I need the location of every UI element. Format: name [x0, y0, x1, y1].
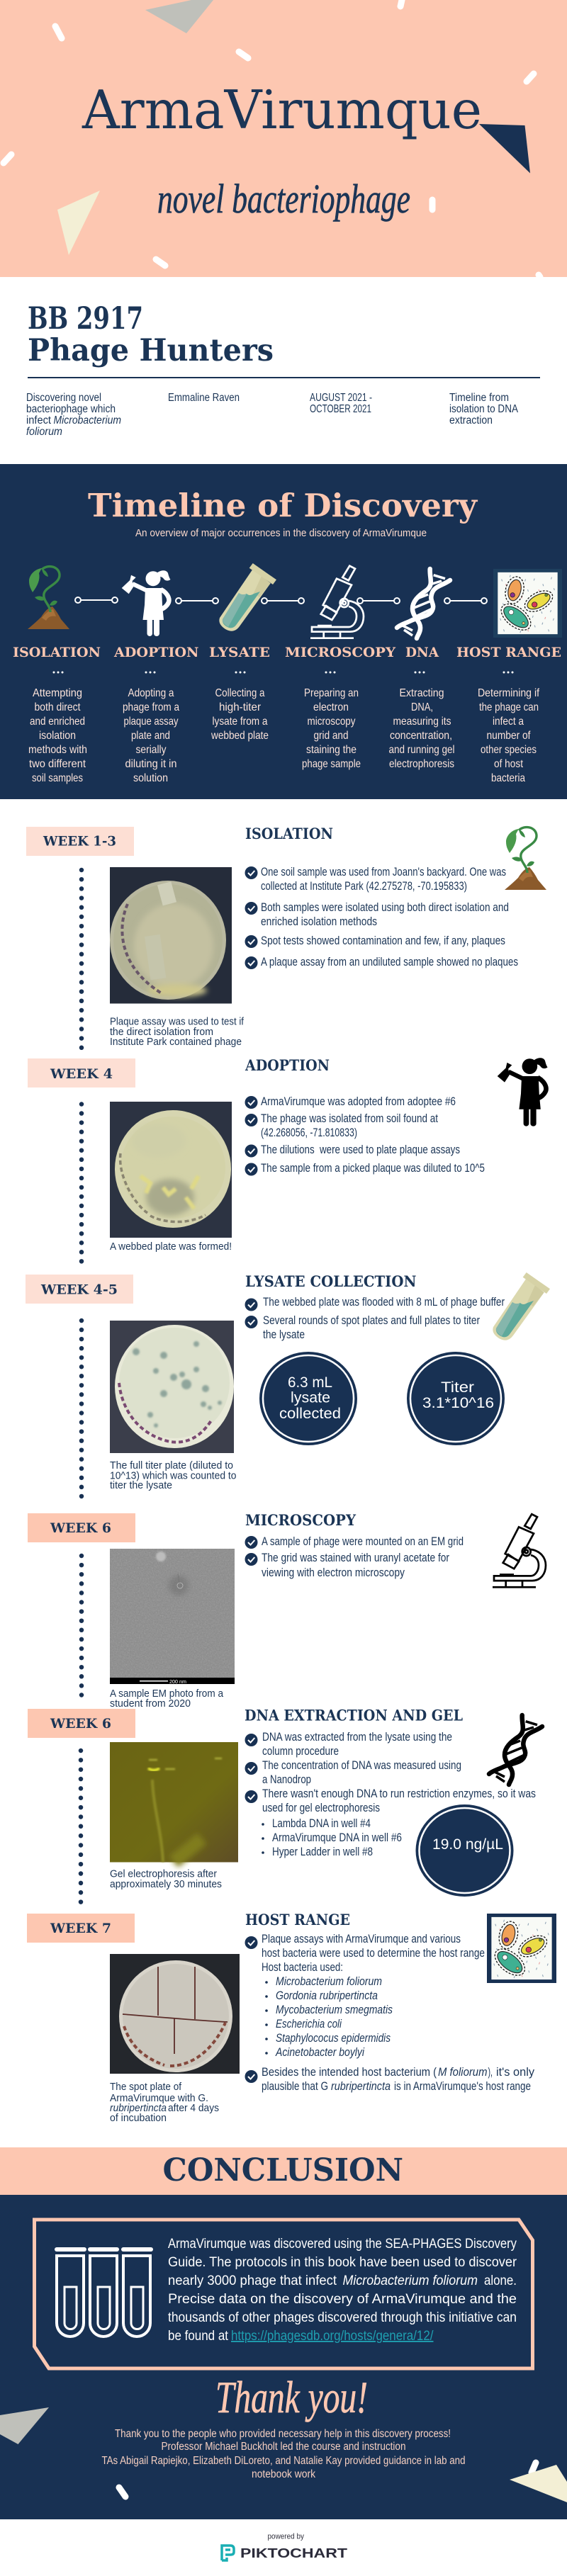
caption: of incubation — [110, 2113, 167, 2124]
list: host bacteria: Gordonia rubripertincta — [276, 1989, 378, 2002]
text block: conclusion: Guide. The protocols in this book have been used to discover — [168, 2255, 517, 2270]
checklist — [245, 1932, 485, 1974]
text block: lysate summary: high-titer — [219, 701, 262, 713]
text block: scope: isolation to DNA — [449, 403, 519, 415]
checklist: used for gel electrophoresis — [262, 1801, 380, 1814]
list: gel wells: Lambda DNA in well #4 — [272, 1817, 371, 1830]
callout: lysate volume: collected — [279, 1406, 341, 1422]
icon: test tube — [493, 1272, 550, 1340]
text block: isolation summary: isolation — [39, 730, 76, 742]
finding: Besides the intended host bacterium ( — [262, 2065, 437, 2079]
footer: piktochart credit: PIKTOCHART — [240, 2546, 347, 2560]
list: gel wells: ArmaVirumque DNA in well #6 — [272, 1831, 402, 1844]
text block: isolation summary: both direct — [34, 701, 81, 713]
text block: conclusion — [168, 2237, 517, 2344]
icon: girl with flask — [122, 570, 170, 636]
text block: lysate summary: lysate from a — [213, 716, 268, 728]
text block: scope: Timeline from — [449, 392, 509, 404]
subheading: An overview of major occurrences in the discovery of ArmaVirumque — [135, 527, 427, 539]
icon: test tubes — [55, 2247, 153, 2337]
text block: isolation summary: and enriched — [30, 716, 85, 728]
timeline dots — [79, 1751, 83, 1904]
text block: project description: infect — [26, 414, 52, 426]
finding: is in ArmaVirumque's host range — [394, 2079, 531, 2093]
checklist: (42.268056, -71.810833) — [261, 1126, 357, 1139]
text block: isolation summary: Attempting — [33, 687, 82, 699]
week tag: WEEK 4 — [50, 1066, 113, 1082]
caption — [110, 1688, 224, 1710]
panel: week 6 microscopy — [28, 1511, 546, 1710]
stage labels: HOST RANGE — [456, 645, 561, 660]
panel: header banner — [0, 0, 567, 277]
text block: microscopy summary: electron — [313, 701, 349, 713]
text block: lysate summary: webbed plate — [210, 730, 269, 742]
text block: adoption summary: serially — [136, 744, 166, 756]
text block: DNA summary: DNA, — [411, 701, 433, 713]
heading: DNA extraction and gel: DNA EXTRACTION AND GEL — [245, 1706, 463, 1724]
callout: titer: 3.1*10^16 — [422, 1395, 494, 1411]
text block: DNA summary: measuring its — [393, 716, 451, 728]
checklist: A sample of phage were mounted on an EM grid — [262, 1535, 464, 1548]
text block: conclusion: nearly 3000 phage that infect — [168, 2273, 337, 2288]
text block: host range summary: bacteria — [491, 772, 525, 784]
text block: microscopy summary — [302, 687, 361, 770]
icon: bacteria — [493, 569, 562, 638]
checklist: collected at Institute Park (42.275278, -70.195833) — [261, 879, 467, 893]
list: host bacteria: Staphylococus epidermidis — [276, 2031, 391, 2045]
text block: host range summary — [478, 687, 539, 784]
callout frame — [34, 2220, 533, 2368]
panel: conclusion heading: CONCLUSION — [163, 2152, 403, 2188]
caption — [110, 2081, 219, 2124]
text block: dates — [310, 392, 372, 415]
photo: plaque assay plate — [110, 867, 232, 1003]
text block: isolation summary: methods with — [28, 744, 87, 756]
text block: conclusion: https://phagesdb.org/hosts/genera/12/ — [231, 2329, 434, 2344]
text block: conclusion: thousands of other phages discovered through this initiative can — [168, 2310, 517, 2325]
text block: project description: Microbacterium — [54, 414, 121, 426]
text block: scope: extraction — [449, 414, 493, 426]
text block: conclusion: be found at — [168, 2329, 229, 2344]
text block: DNA summary: electrophoresis — [389, 758, 454, 770]
list: gel wells — [262, 1817, 402, 1858]
panel: course heading — [26, 301, 540, 438]
caption: student from 2020 — [110, 1698, 191, 1710]
footer: piktochart credit — [222, 2532, 347, 2560]
heading: microscopy: MICROSCOPY — [245, 1511, 357, 1529]
text block: dates: OCTOBER 2021 — [310, 403, 371, 415]
photo: full titer plate — [110, 1321, 234, 1453]
text block: conclusion: alone. — [484, 2273, 517, 2288]
caption: The spot plate of — [110, 2081, 182, 2093]
stage labels: DNA — [405, 645, 439, 660]
footer: piktochart credit: powered by — [268, 2532, 304, 2541]
text block: host range summary: other species — [481, 744, 537, 756]
icon: microscope — [310, 566, 364, 638]
checklist: host bacteria were used to determine the host range — [262, 1946, 485, 1960]
caption: Institute Park contained phage — [110, 1036, 242, 1048]
text block: adoption summary — [123, 687, 179, 784]
ellipsis separators — [54, 672, 512, 673]
checklist: the lysate — [263, 1328, 305, 1341]
stage labels: MICROSCOPY — [285, 645, 395, 660]
subtitle: novel bacteriophage — [157, 176, 410, 222]
list: gel wells: Hyper Ladder in well #8 — [272, 1845, 373, 1858]
callout: lysate volume: 6.3 mL — [288, 1374, 332, 1391]
caption: 10^13) which was counted to — [110, 1471, 237, 1482]
checklist — [245, 865, 518, 969]
checklist: viewing with electron microscopy — [262, 1566, 405, 1579]
heading: lysate collection: LYSATE COLLECTION — [245, 1272, 417, 1290]
week tag: WEEK 7 — [50, 1921, 111, 1936]
text block: host range summary: Determining if — [478, 687, 539, 699]
text block: microscopy summary: Preparing an — [304, 687, 359, 699]
callout: DNA concentration: 19.0 ng/µL — [432, 1836, 503, 1853]
photo: electron micrograph — [110, 1549, 235, 1685]
text block: microscopy summary: staining the — [306, 744, 357, 756]
heading: adoption: ADOPTION — [245, 1056, 330, 1074]
timeline dots — [79, 1321, 84, 1499]
text block: host range summary: number of — [486, 730, 531, 742]
timeline dots — [79, 1104, 84, 1263]
week tag — [28, 1058, 135, 1088]
caption: titer the lysate — [110, 1480, 172, 1491]
text block: microscopy summary: phage sample — [302, 758, 361, 770]
text block: DNA summary: Extracting — [400, 687, 444, 699]
caption — [110, 1869, 222, 1890]
checklist: The concentration of DNA was measured using — [262, 1758, 461, 1772]
finding: ), — [488, 2065, 493, 2079]
checklist: Plaque assays with ArmaVirumque and various — [262, 1932, 461, 1945]
photo: gel electrophoresis — [110, 1742, 238, 1862]
finding: M foliorum — [438, 2065, 488, 2079]
checklist: The grid was stained with uranyl acetate for — [262, 1551, 449, 1564]
panel: course heading: Phage Hunters — [28, 333, 274, 368]
checklist: a Nanodrop — [262, 1773, 311, 1786]
callout: titer: Titer — [441, 1379, 474, 1396]
text block: adoption summary: plate and — [131, 730, 170, 742]
caption: approximately 30 minutes — [110, 1879, 222, 1890]
week tag — [28, 1709, 135, 1738]
caption: rubripertincta — [110, 2103, 167, 2114]
stage labels — [13, 645, 561, 660]
caption: A webbed plate was formed! — [110, 1241, 232, 1253]
text block: microscopy summary: microscopy — [308, 716, 356, 728]
caption — [110, 1460, 237, 1491]
text block: project description: bacteriophage which — [26, 403, 116, 415]
checklist: Spot tests showed contamination and few, if any, plaques — [261, 934, 505, 947]
text block: microscopy summary: grid and — [313, 730, 349, 742]
heading: timeline: Timeline of Discovery — [88, 487, 478, 524]
text block: isolation summary — [28, 687, 87, 784]
text block: isolation summary: soil samples — [32, 772, 83, 784]
stage labels: ADOPTION — [113, 645, 198, 660]
timeline dots — [79, 1556, 84, 1696]
week tag: WEEK 4-5 — [40, 1282, 118, 1298]
checklist — [245, 1295, 505, 1341]
checklist: enriched isolation methods — [261, 915, 377, 928]
text block: conclusion: Microbacterium foliorum — [343, 2273, 478, 2288]
icon: DNA — [489, 1715, 542, 1785]
callout: lysate volume — [259, 1352, 357, 1445]
heading: isolation: ISOLATION — [245, 825, 333, 842]
text block: adoption summary: diluting it in — [125, 758, 177, 770]
week tag: WEEK 1-3 — [43, 833, 116, 849]
heading: host range: HOST RANGE — [245, 1911, 350, 1928]
week tag — [27, 1914, 135, 1943]
timeline dots — [79, 870, 84, 1050]
checklist: The phage was isolated from soil found at — [261, 1112, 438, 1125]
caption: A sample EM photo from a — [110, 1688, 224, 1700]
panel: week 1-3 isolation — [26, 825, 546, 1050]
text block: lysate summary: Collecting a — [215, 687, 265, 699]
callout: lysate volume: lysate — [291, 1390, 330, 1406]
stage labels: ISOLATION — [13, 645, 101, 660]
text block: dates: AUGUST 2021 - — [310, 392, 372, 404]
heading: thank you: Thank you! — [215, 2372, 368, 2422]
title: ArmaVirumque — [82, 79, 482, 141]
checklist: DNA was extracted from the lysate using the — [262, 1730, 452, 1744]
text block: adoption summary: plaque assay — [123, 716, 179, 728]
list: host bacteria: Acinetobacter boylyi — [275, 2045, 365, 2059]
photo: spot plate — [110, 1954, 240, 2074]
checklist — [245, 1730, 536, 1814]
text block: acknowledgements: Professor Michael Buckholt led the course and instruction — [162, 2441, 405, 2453]
icon: DNA — [397, 569, 450, 638]
text block: acknowledgements: Thank you to the people who provided necessary help in this discovery process! — [115, 2428, 451, 2440]
text block: adoption summary: solution — [133, 772, 168, 784]
text block: isolation summary: two different — [29, 758, 86, 770]
photo: webbed plate — [110, 1102, 232, 1238]
icon: microscope — [493, 1514, 546, 1587]
text block: acknowledgements: notebook work — [252, 2468, 315, 2480]
text block: lysate summary — [210, 687, 269, 742]
text block: DNA summary: concentration, — [390, 730, 452, 742]
text block: acknowledgements — [102, 2428, 465, 2480]
caption: The full titer plate (diluted to — [110, 1460, 233, 1471]
checklist: column procedure — [262, 1744, 339, 1758]
week tag — [28, 1513, 135, 1542]
panel: week 6 DNA extraction and gel — [28, 1706, 542, 1904]
icon: plant — [505, 827, 546, 890]
list: host bacteria: Escherichia coli — [276, 2017, 342, 2030]
text block: project description: Discovering novel — [26, 392, 101, 404]
heading: BB 2917: BB 2917 — [28, 301, 143, 337]
caption: Plaque assay was used to test if — [110, 1016, 245, 1027]
panel: timeline of discovery — [0, 464, 567, 799]
checklist: The dilutions were used to plate plaque assays — [261, 1143, 460, 1156]
callout: titer — [407, 1352, 505, 1445]
text block: adoption summary: Adopting a — [128, 687, 174, 699]
text block: host range summary: infect a — [493, 716, 524, 728]
finding — [245, 2065, 534, 2093]
icon: girl with flask — [498, 1058, 548, 1126]
checklist: Several rounds of spot plates and full plates to titer — [263, 1314, 480, 1327]
panel: conclusion — [0, 2195, 567, 2519]
text block: conclusion: Precise data on the discovery of ArmaVirumque and the — [168, 2292, 517, 2307]
text block: project description — [26, 392, 121, 438]
text block: scope — [449, 392, 519, 426]
text block: conclusion: ArmaVirumque was discovered using the SEA-PHAGES Discovery — [168, 2237, 517, 2252]
caption: the direct isolation from — [110, 1027, 213, 1038]
week tag: WEEK 6 — [50, 1520, 111, 1536]
list: host bacteria: Microbacterium foliorum — [276, 1975, 382, 1988]
checklist: The sample from a picked plaque was diluted to 10^5 — [261, 1161, 485, 1175]
week tag — [26, 1275, 133, 1304]
list: host bacteria — [265, 1975, 393, 2059]
text block: host range summary: the phage can — [479, 701, 539, 713]
checklist: Both samples were isolated using both direct isolation and — [261, 900, 509, 914]
caption: after 4 days — [168, 2103, 219, 2114]
caption: ArmaVirumque with G. — [110, 2093, 208, 2104]
icon: plant — [28, 567, 69, 629]
icon: test tube — [219, 563, 276, 631]
icon: bacteria — [487, 1914, 556, 1983]
checklist: ArmaVirumque was adopted from adoptee #6 — [261, 1095, 456, 1108]
list: host bacteria: Mycobacterium smegmatis — [276, 2003, 393, 2016]
icon: piktochart logo — [222, 2546, 234, 2560]
panel: week 4-5 lysate collection — [26, 1272, 550, 1499]
finding: it's only — [496, 2065, 534, 2079]
text block: project description: foliorum — [26, 426, 62, 438]
week tag — [26, 827, 134, 856]
finding: plausible that G — [262, 2079, 328, 2093]
panel: week 4 adoption — [28, 1056, 548, 1263]
stage labels: LYSATE — [209, 645, 270, 660]
finding: rubripertincta — [331, 2079, 391, 2093]
text block: acknowledgements: TAs Abigail Rapiejko, Elizabeth DiLoreto, and Natalie Kay provided guidance in lab and — [102, 2455, 465, 2467]
checklist: Host bacteria used: — [262, 1960, 343, 1974]
week tag: WEEK 6 — [50, 1716, 111, 1732]
checklist — [245, 1095, 485, 1176]
text block: DNA summary: and running gel — [388, 744, 455, 756]
panel: conclusion heading — [0, 2147, 567, 2195]
checklist — [245, 1535, 464, 1579]
text block: host range summary: of host — [494, 758, 523, 770]
callout: DNA concentration — [415, 1804, 513, 1897]
text block: author: Emmaline Raven — [168, 392, 240, 404]
connectors — [75, 597, 487, 604]
text block: DNA summary — [388, 687, 455, 770]
checklist: The webbed plate was flooded with 8 mL of phage buffer — [263, 1295, 505, 1309]
text block: adoption summary: phage from a — [123, 701, 179, 713]
caption — [110, 1016, 245, 1048]
photo: electron micrograph: 200 nm — [169, 1680, 186, 1685]
caption: Gel electrophoresis after — [110, 1869, 217, 1880]
panel: week 7 host range — [27, 1911, 556, 2124]
